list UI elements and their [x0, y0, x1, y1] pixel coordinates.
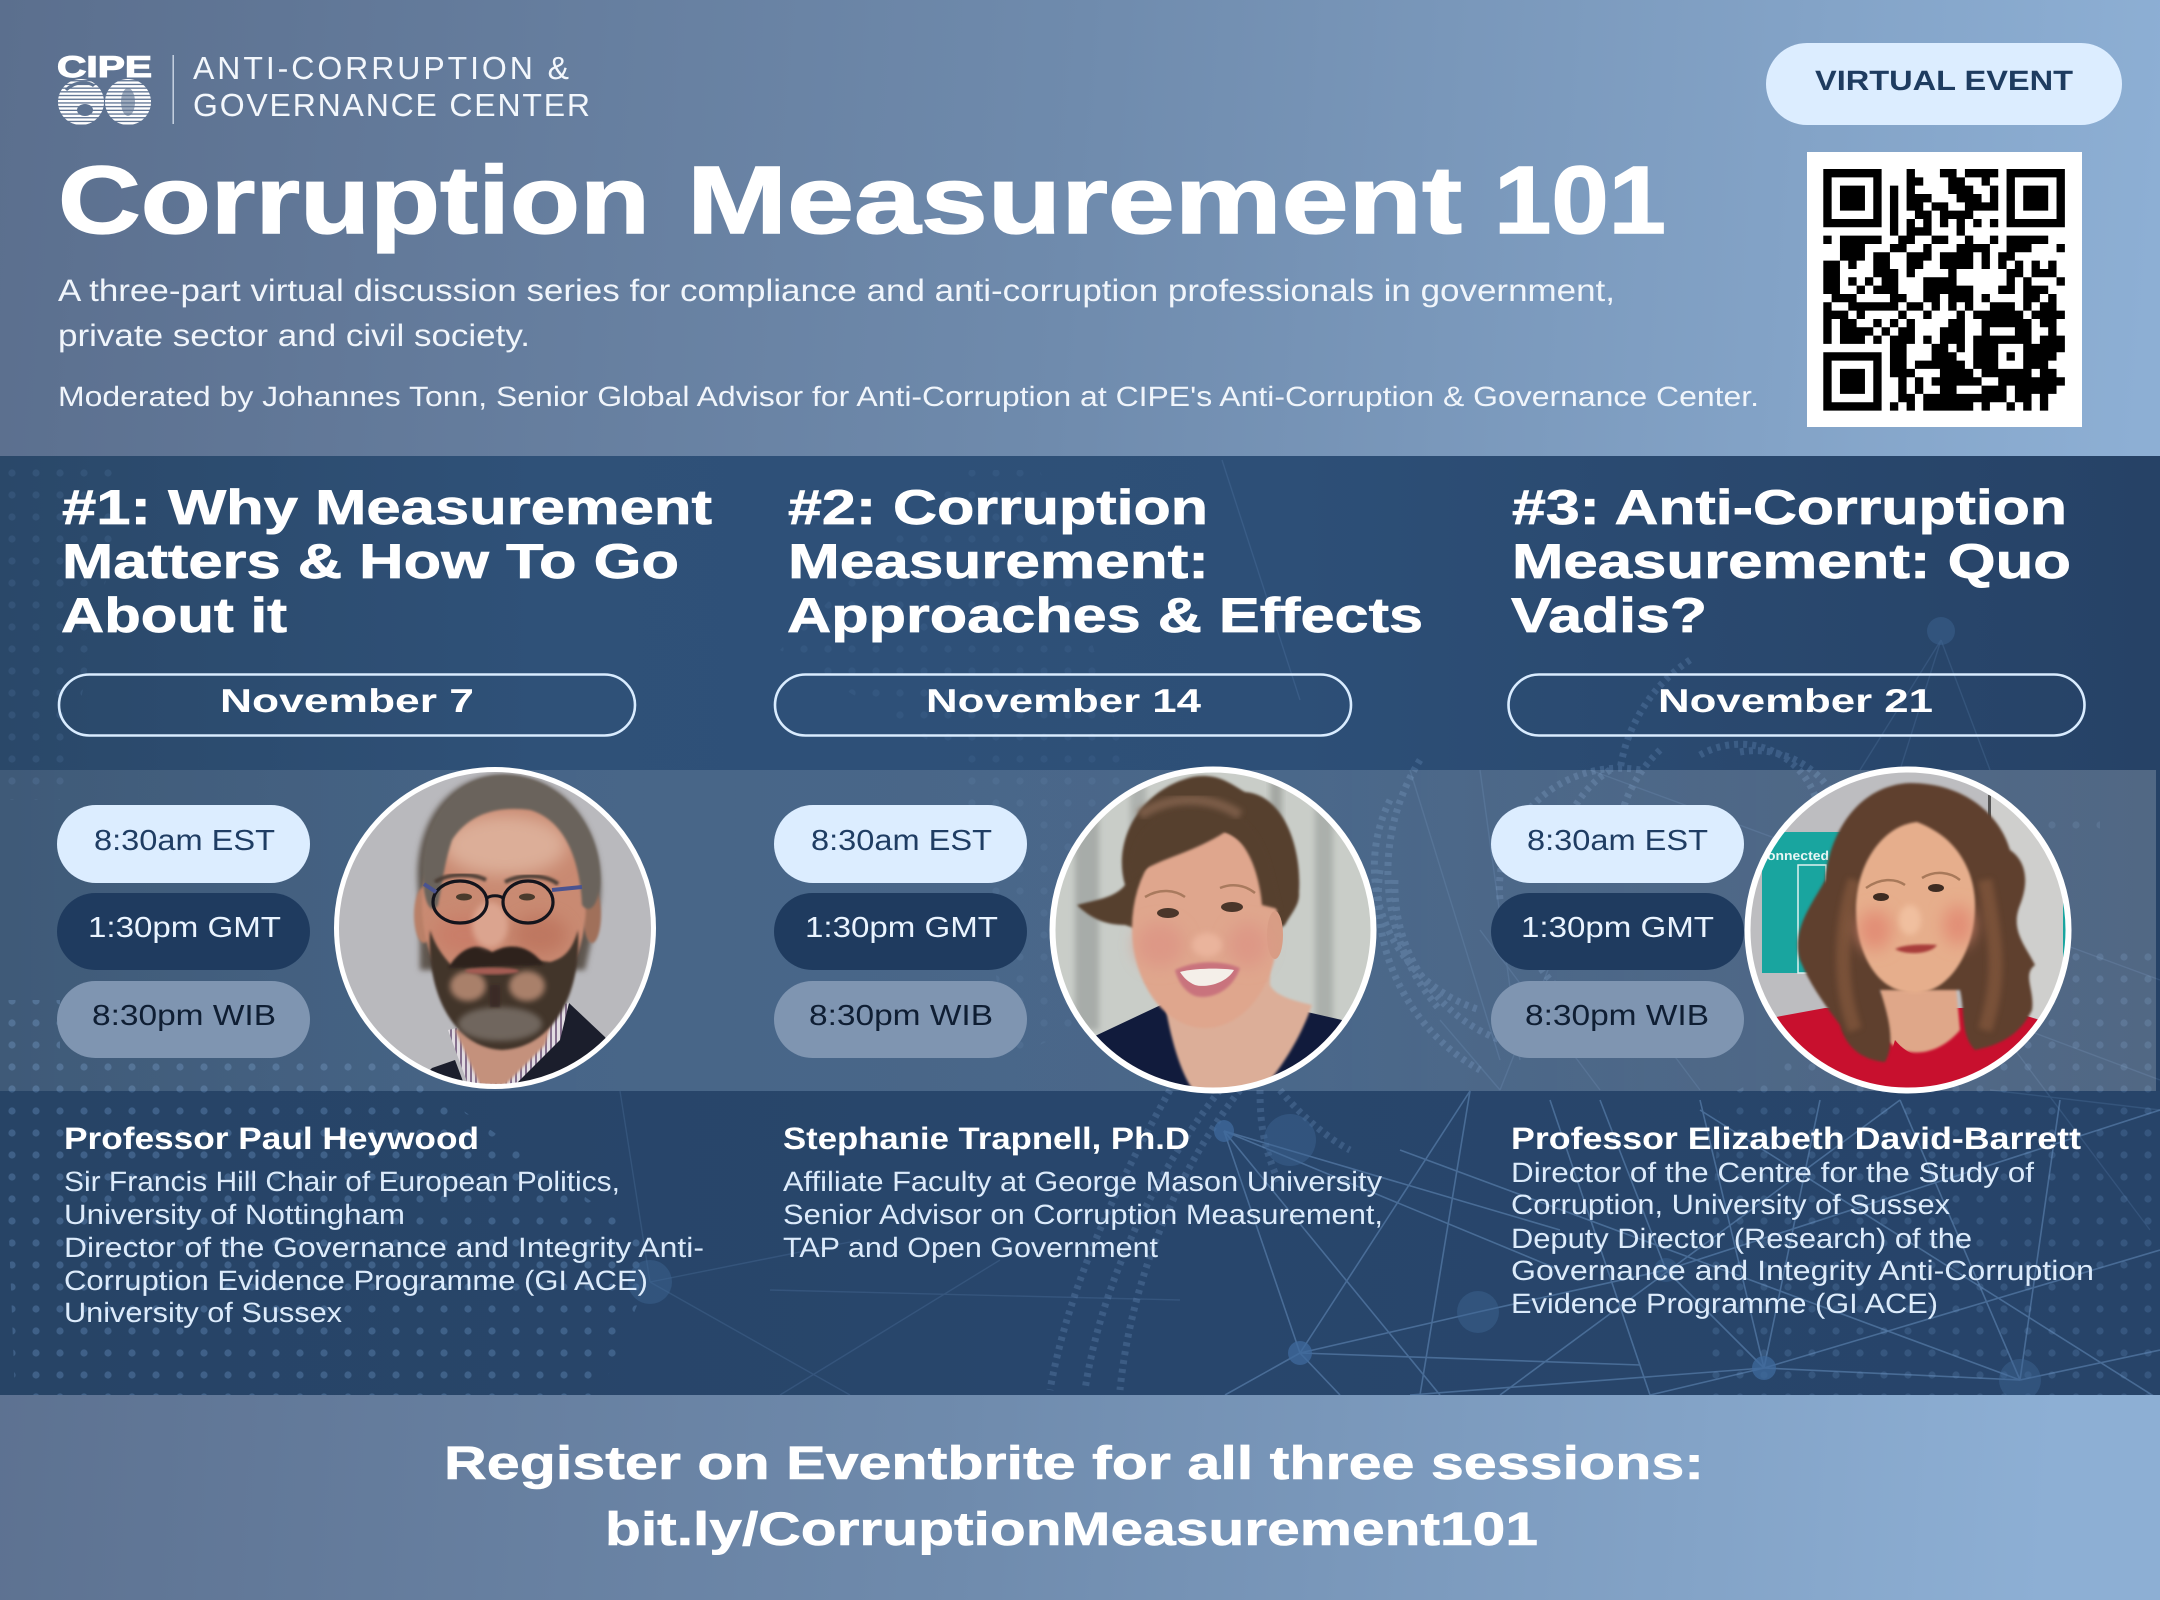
speaker bio: Elizabeth David-Barrett: Professor Elizabeth David-Barrett [1511, 1121, 2081, 1156]
speaker bio: Paul Heywood: Sir Francis Hill Chair of European Politics, [64, 1166, 620, 1197]
time pills: session 1: 8:30pm WIB [92, 1000, 276, 1032]
time pills: session 3: 8:30am EST [1527, 825, 1708, 857]
date pill: November 7 [59, 674, 635, 736]
portrait: Elizabeth David-Barrett [1740, 765, 2075, 1100]
speaker bio: Paul Heywood: University of Nottingham [64, 1199, 405, 1230]
footer: registration call to action: bit.ly/CorruptionMeasurement101 [605, 1502, 1538, 1555]
time pills: session 1: 8:30am EST [94, 825, 275, 857]
speaker bio: Paul Heywood: Corruption Evidence Programme (GI ACE) [64, 1265, 648, 1296]
session 3 heading: #3: Anti-Corruption [1512, 481, 2067, 535]
speaker bio: Paul Heywood: Professor Paul Heywood [64, 1121, 479, 1156]
time pills: session 3: 1:30pm GMT [1521, 912, 1714, 944]
session 3 heading: Vadis? [1511, 589, 1707, 643]
logo: CIPE 60 and Anti-Corruption & Governance Center [57, 50, 590, 125]
date pill: November 14: November 14 [926, 682, 1202, 719]
title: Corruption [58, 147, 650, 254]
speaker bio: Stephanie Trapnell: Senior Advisor on Corruption Measurement, [783, 1199, 1383, 1230]
date pill: November 7: November 7 [220, 682, 474, 719]
speaker bio: Paul Heywood: Director of the Governance and Integrity Anti- [64, 1232, 704, 1263]
session 3 heading [1511, 481, 2071, 643]
session 1 heading: About it [61, 589, 287, 643]
title: Measurement [687, 147, 1462, 254]
speaker bio: Stephanie Trapnell [783, 1121, 1383, 1263]
badge: virtual event [1766, 43, 2122, 125]
portrait: Paul Heywood [330, 765, 660, 1100]
logo: CIPE 60 and Anti-Corruption & Governance Center: ANTI-CORRUPTION & [193, 50, 569, 86]
portrait: Elizabeth David-Barrett: onnected [1767, 848, 1829, 863]
title [58, 147, 1666, 254]
logo: CIPE 60 and Anti-Corruption & Governance Center: CIPE [57, 51, 152, 84]
footer: registration call to action [444, 1436, 1704, 1555]
session 1 heading: Matters & How To Go [62, 535, 679, 589]
time pills: session 3 [1491, 805, 1744, 1058]
subtitle text: private sector and civil society. [58, 318, 530, 353]
portrait: Stephanie Trapnell [1045, 765, 1380, 1100]
speaker bio: Elizabeth David-Barrett: Governance and Integrity Anti-Corruption [1511, 1255, 2094, 1286]
time pills: session 2 [774, 805, 1027, 1058]
session 1 heading: #1: Why Measurement [62, 481, 712, 535]
date pill: November 21: November 21 [1658, 682, 1933, 719]
date pill: November 21 [1508, 674, 2084, 736]
session 3 heading: Measurement: Quo [1512, 535, 2071, 589]
session 2 heading: Approaches & Effects [787, 589, 1423, 643]
subtitle text [58, 273, 1615, 353]
speaker bio: Elizabeth David-Barrett [1511, 1121, 2094, 1319]
logo: CIPE 60 and Anti-Corruption & Governance Center: GOVERNANCE CENTER [193, 87, 590, 123]
subtitle text: A three-part virtual discussion series for compliance and anti-corruption professionals in government, [58, 273, 1615, 308]
speaker bio: Elizabeth David-Barrett: Director of the Centre for the Study of [1511, 1157, 2034, 1188]
speaker bio: Elizabeth David-Barrett: Deputy Director (Research) of the [1511, 1223, 1972, 1254]
time pills: session 2: 1:30pm GMT [805, 912, 998, 944]
speaker bio: Stephanie Trapnell: Affiliate Faculty at George Mason University [783, 1166, 1382, 1197]
QR code [1807, 152, 2082, 427]
speaker bio: Elizabeth David-Barrett: Evidence Programme (GI ACE) [1511, 1288, 1938, 1319]
time pills: session 2: 8:30pm WIB [809, 1000, 993, 1032]
speaker bio: Paul Heywood: University of Sussex [64, 1297, 342, 1328]
session 2 heading: Measurement: [788, 535, 1209, 589]
title: 101 [1494, 147, 1666, 254]
time pills: session 1 [57, 805, 310, 1058]
footer: registration call to action: Register on Eventbrite for all three sessions: [444, 1436, 1704, 1489]
speaker bio: Paul Heywood [64, 1121, 704, 1328]
session 2 heading: #2: Corruption [788, 481, 1208, 535]
time pills: session 2: 8:30am EST [811, 825, 992, 857]
time pills: session 3: 8:30pm WIB [1525, 1000, 1709, 1032]
time pills: session 1: 1:30pm GMT [88, 912, 281, 944]
session 2 heading [787, 481, 1423, 643]
speaker bio: Stephanie Trapnell: Stephanie Trapnell, Ph.D [783, 1121, 1190, 1156]
moderator line: Moderated by Johannes Tonn, Senior Global Advisor for Anti-Corruption at CIPE's Anti-Corruption & Governance Center. [58, 381, 1759, 412]
speaker bio: Elizabeth David-Barrett: Corruption, University of Sussex [1511, 1189, 1950, 1220]
panel: dark session band with texture [0, 456, 2160, 1401]
speaker bio: Stephanie Trapnell: TAP and Open Government [783, 1232, 1158, 1263]
session 1 heading [61, 481, 712, 643]
badge: virtual event: VIRTUAL EVENT [1815, 65, 2073, 96]
date pill: November 14 [775, 674, 1351, 736]
